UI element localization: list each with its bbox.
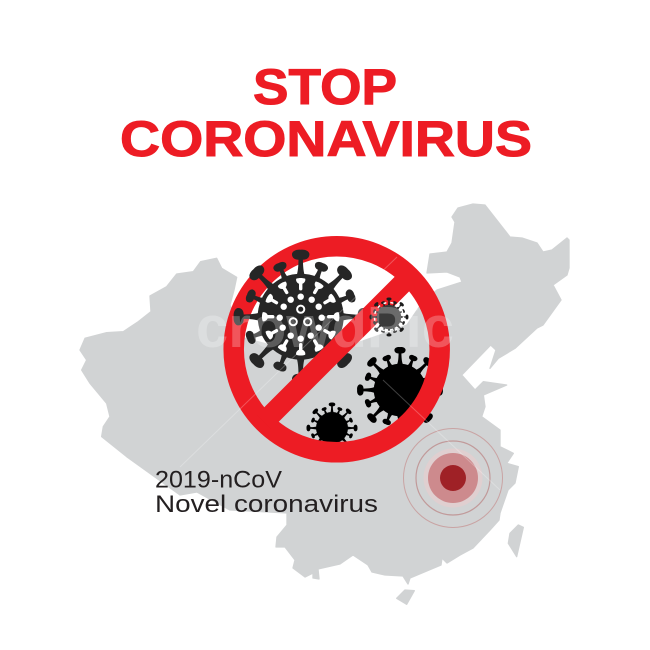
island: Hainan <box>397 590 414 604</box>
virus: small grey <box>370 298 408 336</box>
label: virus name: Novel coronavirus <box>155 491 378 518</box>
virus: bottom black <box>307 403 357 453</box>
map of China <box>80 204 569 604</box>
prohibition bar <box>264 276 410 422</box>
prohibition ring <box>234 246 440 452</box>
island: Taiwan <box>508 525 523 557</box>
title <box>120 59 532 167</box>
label: virus name: 2019-nCoV <box>155 466 283 494</box>
title: CORONAVIRUS <box>120 111 532 167</box>
virus: large black <box>357 347 443 433</box>
label: virus name <box>155 466 378 518</box>
title: STOP <box>253 59 397 115</box>
virus: big dark with white markings <box>234 250 368 384</box>
watermark: crowdPic <box>196 295 454 360</box>
outbreak target <box>404 428 502 528</box>
watermark <box>180 257 500 490</box>
